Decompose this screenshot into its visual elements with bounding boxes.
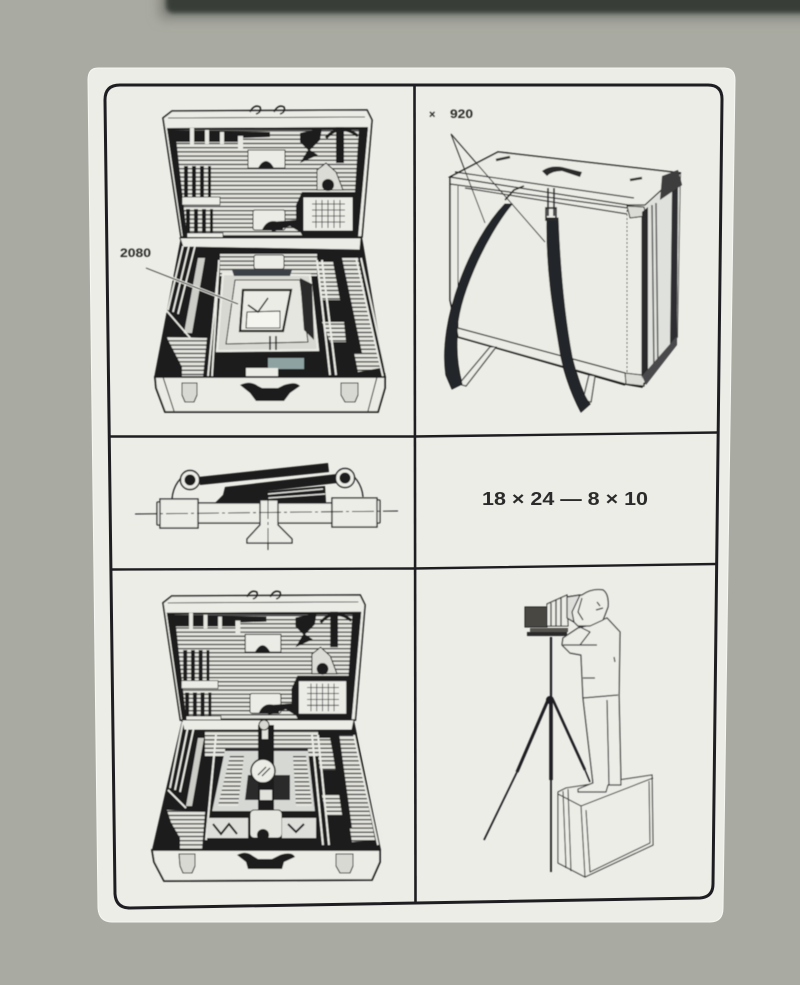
photographer figure <box>562 590 621 792</box>
panel: rail cross-section diagram <box>135 463 398 553</box>
callout: 2080 leader line <box>120 248 238 304</box>
case front panel with handle <box>152 850 380 881</box>
case base interior <box>152 720 382 850</box>
case lid interior <box>163 106 372 240</box>
case lid interior <box>163 591 365 723</box>
right strap <box>547 218 590 412</box>
case base interior <box>154 237 386 378</box>
view camera <box>525 595 568 636</box>
roller right <box>336 468 354 488</box>
black bars and bellows <box>198 463 337 503</box>
roller left <box>180 470 200 490</box>
suitcase <box>558 775 653 877</box>
callout: 920 with leader lines: 920 <box>450 109 473 121</box>
bellows and monorail <box>207 720 316 841</box>
case body <box>450 152 682 387</box>
rail body <box>157 471 380 528</box>
strap buckles <box>505 186 556 220</box>
callout: 920 with leader lines <box>429 109 545 242</box>
panel: photographer standing on case <box>484 590 653 877</box>
callout: 2080 leader line: 2080 <box>120 248 151 260</box>
panel borders: six-cell grid frame <box>105 85 722 908</box>
tripod <box>484 637 590 872</box>
panel: open case with camera, bottom left <box>152 591 382 881</box>
left strap <box>445 204 512 389</box>
bellows frame <box>217 270 318 351</box>
case front panel with handle <box>155 377 385 412</box>
stand legs <box>459 347 595 402</box>
card: white instruction plate <box>88 68 735 922</box>
centre lines <box>135 497 398 553</box>
callout: 920 with leader lines: × <box>429 109 435 121</box>
heading: format label: 18 × 24 — 8 × 10 <box>482 489 648 509</box>
panel: open case with frame, top left <box>120 106 386 412</box>
dark object at top edge <box>160 0 800 18</box>
panel: closed case with straps, top right <box>429 109 682 412</box>
tripod mount foot <box>247 500 292 543</box>
